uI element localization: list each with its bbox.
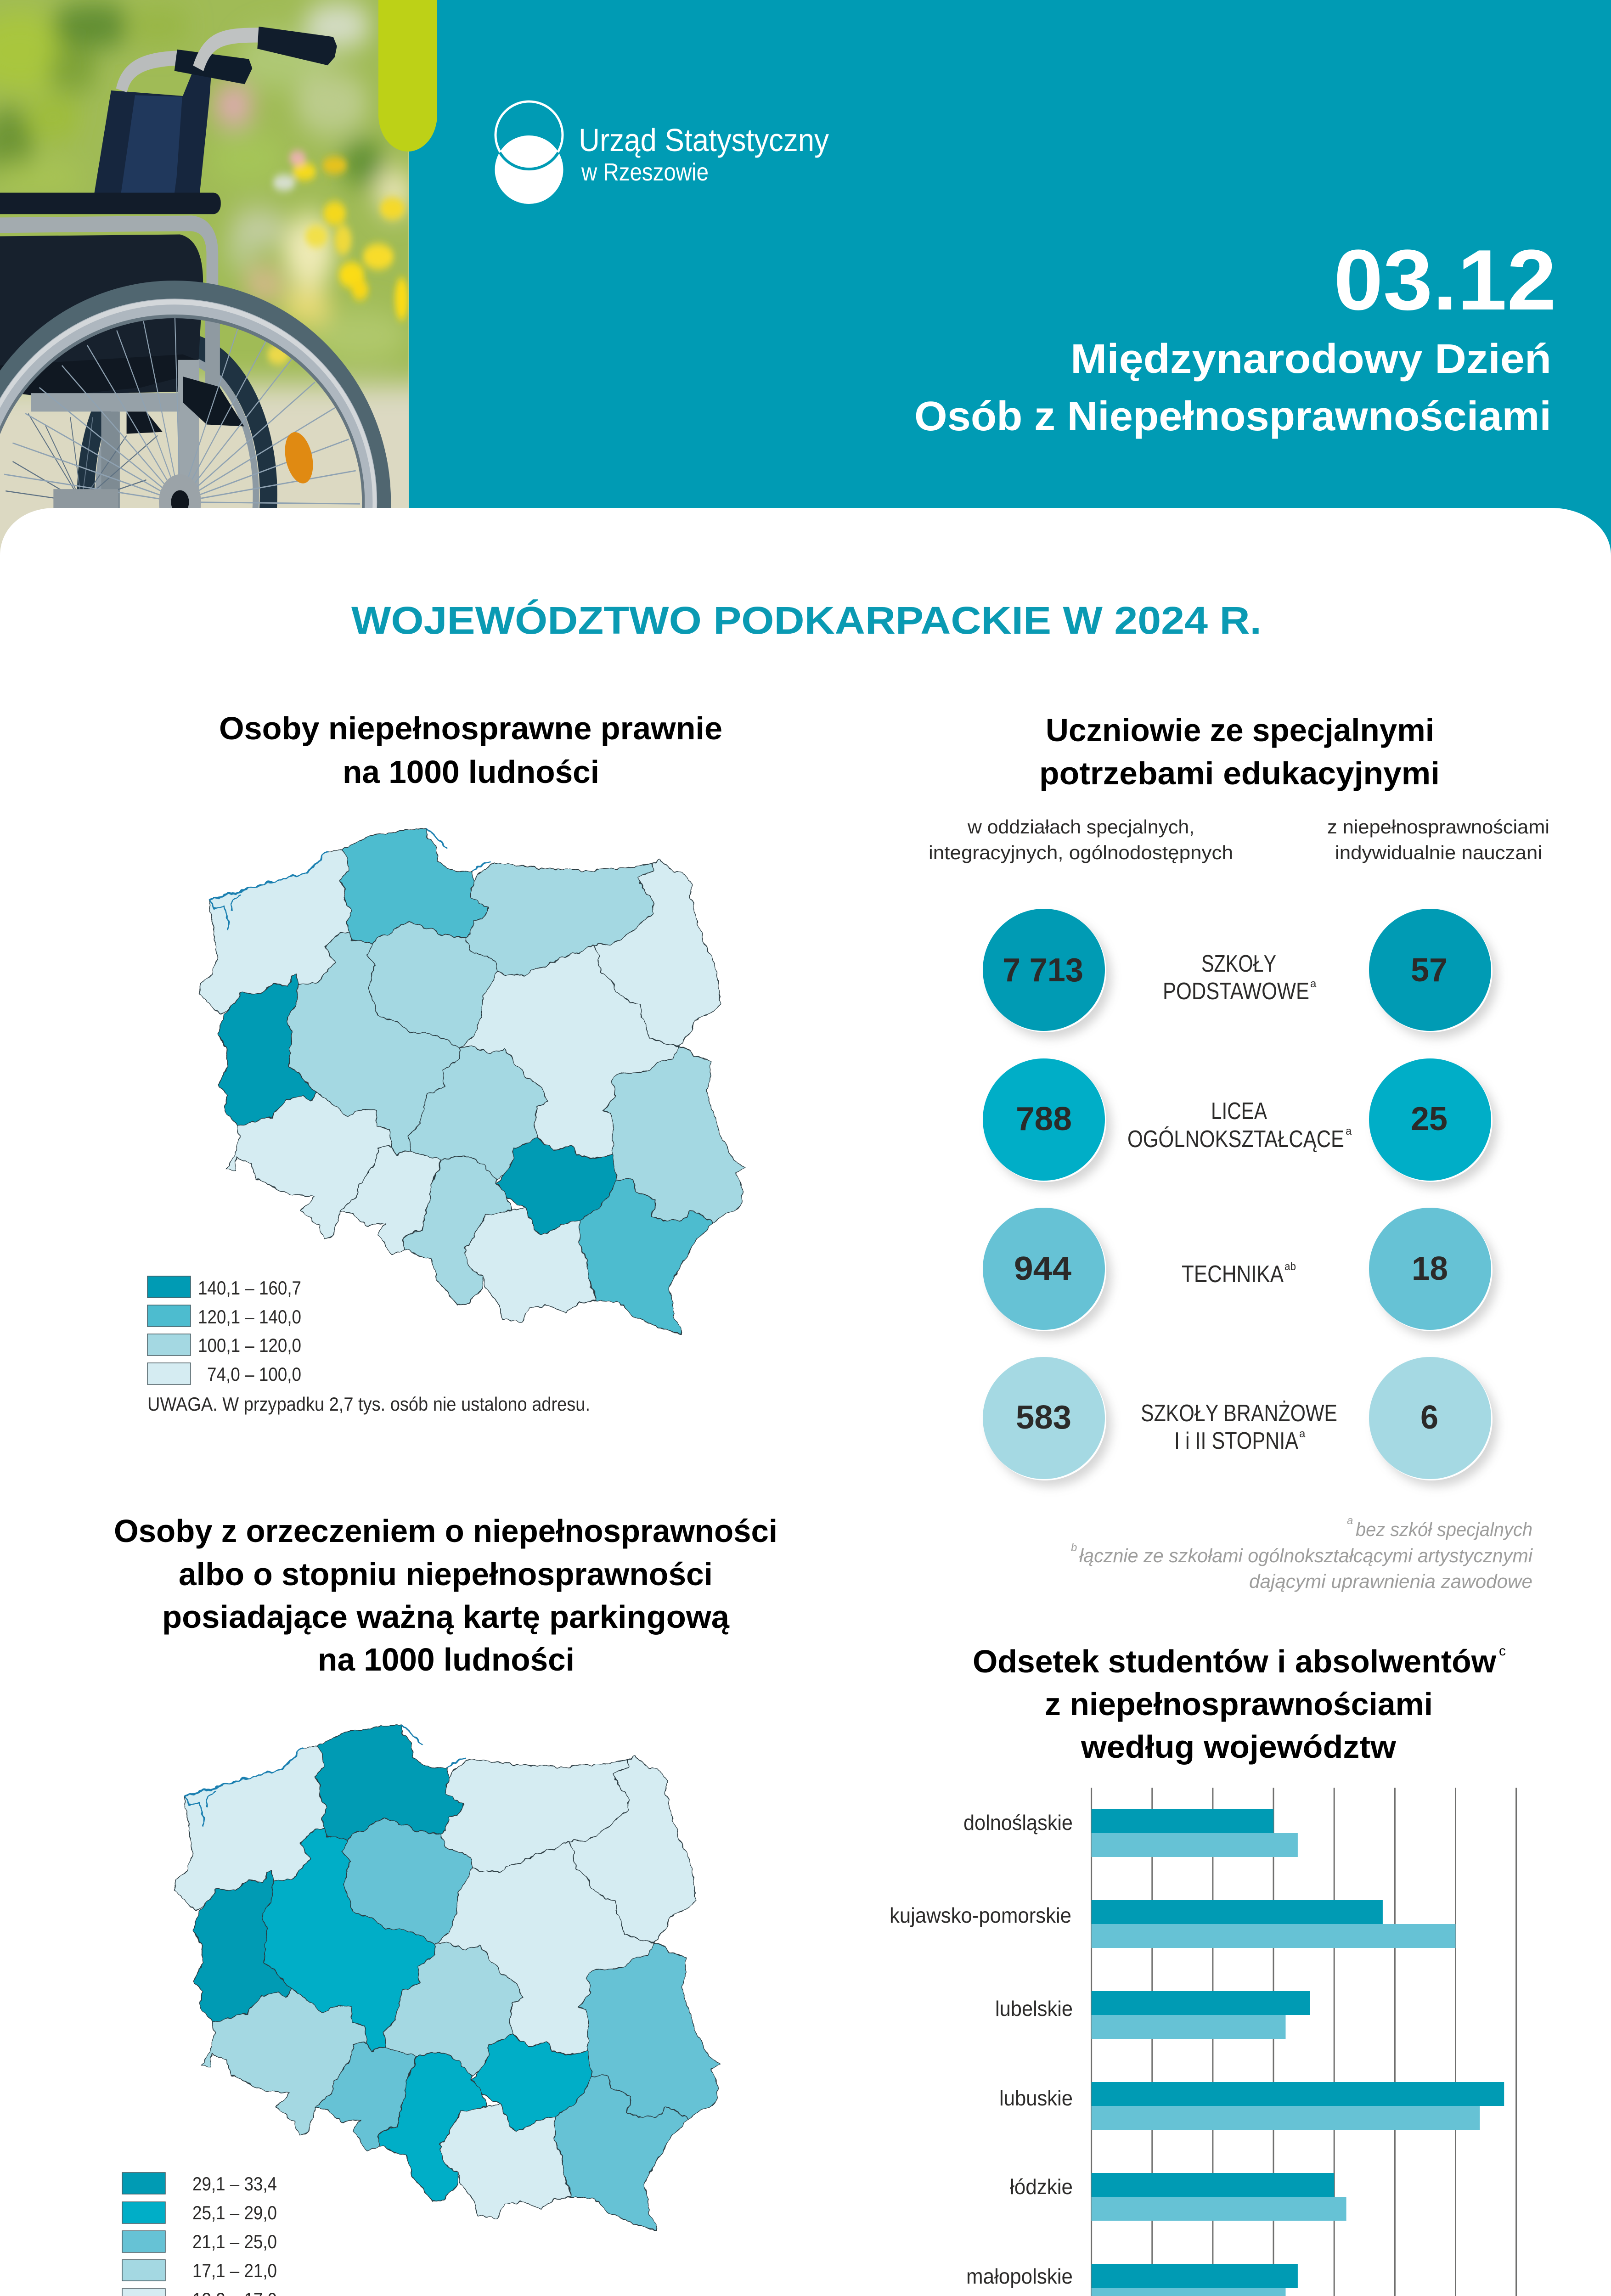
row: technika: 944 <box>1014 1250 1071 1287</box>
row: szkoły branżowe: 583 <box>1016 1399 1071 1436</box>
footnotes: bez szkół specjalnych <box>1356 1519 1532 1540</box>
logo: Urząd Statystyczny w Rzeszowie: w Rzeszowie <box>581 158 709 186</box>
heading: według województw <box>1081 1729 1397 1765</box>
map legend: 100,1 – 120,0 <box>198 1334 301 1356</box>
voivodeship labels <box>879 1811 1073 2296</box>
note: UWAGA. W przypadku 2,7 tys. osób nie ustalono adresu. <box>147 1393 590 1415</box>
column heading: left: integracyjnych, ogólnodostępnych <box>929 842 1233 863</box>
panel: parking card map <box>114 1513 777 2296</box>
row: szkoły podstawowe: 7 713 <box>1003 952 1083 989</box>
panel: students and graduates bar chart <box>879 1643 1535 2296</box>
frame tubes <box>0 223 212 288</box>
heading: na 1000 ludności <box>343 754 599 790</box>
map legend: 140,1 – 160,7 <box>198 1277 301 1299</box>
armrest <box>0 193 221 214</box>
voivodeship labels: lubelskie <box>995 1997 1073 2020</box>
footnotes: łącznie ze szkołami ogólnokształcącymi artystycznymi <box>1079 1545 1533 1566</box>
heading: posiadające ważną kartę parkingową <box>162 1599 730 1635</box>
heading <box>1039 712 1440 791</box>
column heading: right: z niepełnosprawnościami <box>1327 816 1549 838</box>
voivodeship labels: dolnośląskie <box>963 1811 1073 1835</box>
tyre and rim <box>0 290 384 715</box>
row: szkoły branżowe <box>983 1357 1498 1486</box>
main title: WOJEWÓDZTWO PODKARPACKIE W 2024 R. <box>351 599 1262 642</box>
heading: Uczniowie ze specjalnymi <box>1046 712 1434 748</box>
photo: wheelchair in a garden <box>0 0 409 554</box>
row: licea ogólnokształcące: 25 <box>1411 1101 1448 1137</box>
heading: z niepełnosprawnościami <box>1045 1686 1433 1722</box>
chart grid <box>1092 1788 1516 2296</box>
row: licea ogólnokształcące <box>983 1058 1498 1188</box>
footnotes: dającymi uprawnienia zawodowe <box>1249 1570 1532 1592</box>
row: szkoły podstawowe: a <box>1310 978 1317 990</box>
row: szkoły podstawowe: SZKOŁY <box>1201 951 1276 977</box>
voivodeship labels: małopolskie <box>966 2264 1073 2288</box>
map legend <box>147 1276 301 1385</box>
row: technika <box>983 1208 1498 1337</box>
row: licea ogólnokształcące: LICEA <box>1211 1098 1267 1125</box>
wheel behind <box>77 336 277 508</box>
row: szkoły branżowe: SZKOŁY BRANŻOWE <box>1141 1400 1337 1427</box>
voivodeship labels: lubuskie <box>999 2086 1073 2110</box>
row: technika: 18 <box>1412 1250 1448 1287</box>
logo: Urząd Statystyczny w Rzeszowie: Urząd Statystyczny <box>579 122 829 158</box>
map legend: 17,1 – 21,0 <box>192 2260 277 2281</box>
lime tab <box>378 0 437 152</box>
map legend: 21,1 – 25,0 <box>192 2231 277 2252</box>
seat cushion <box>0 234 203 395</box>
row: szkoły podstawowe: 57 <box>1411 952 1448 989</box>
heading: Odsetek studentów i absolwentów <box>973 1643 1497 1679</box>
reflector <box>280 427 318 489</box>
map of Poland <box>199 828 744 1334</box>
heading <box>219 710 722 790</box>
footnotes: b <box>1071 1542 1077 1554</box>
row: technika: TECHNIKA <box>1182 1261 1284 1288</box>
map legend: 25,1 – 29,0 <box>192 2202 277 2223</box>
date and event title: Osób z Niepełnosprawnościami <box>914 394 1551 439</box>
heading: potrzebami edukacyjnymi <box>1039 755 1440 791</box>
row: szkoły podstawowe <box>983 909 1498 1038</box>
row: szkoły branżowe: a <box>1299 1428 1306 1440</box>
row: licea ogólnokształcące: OGÓLNOKSZTAŁCĄCE <box>1127 1126 1344 1153</box>
white content panel <box>0 508 1611 2296</box>
column heading: left <box>929 816 1233 863</box>
row: szkoły podstawowe: PODSTAWOWE <box>1163 978 1309 1005</box>
heading: albo o stopniu niepełnosprawności <box>179 1556 713 1592</box>
date and event title: 03.12 <box>1334 232 1556 328</box>
bars: students <box>1092 1809 1504 2296</box>
heading <box>973 1643 1506 1765</box>
header band <box>409 0 1611 569</box>
panel: pupils with special educational needs <box>929 712 1549 1592</box>
heading: Osoby z orzeczeniem o niepełnosprawności <box>114 1513 777 1549</box>
map legend: 120,1 – 140,0 <box>198 1306 301 1328</box>
footnotes <box>1071 1514 1533 1592</box>
footnotes: a <box>1347 1514 1353 1527</box>
voivodeship labels: kujawsko-pomorskie <box>890 1903 1071 1927</box>
date and event title: Międzynarodowy Dzień <box>1070 336 1551 382</box>
spokes <box>6 413 158 502</box>
map legend: 74,0 – 100,0 <box>207 1363 301 1385</box>
map legend <box>122 2172 277 2296</box>
heading: na 1000 ludności <box>318 1642 575 1677</box>
backrest <box>94 68 212 194</box>
row: technika: ab <box>1284 1261 1296 1273</box>
heading: c <box>1499 1643 1506 1659</box>
map legend: 29,1 – 33,4 <box>192 2173 277 2195</box>
panel: legally disabled persons map <box>147 710 744 1415</box>
column heading: left: w oddziałach specjalnych, <box>967 816 1194 838</box>
handles <box>122 58 180 90</box>
heading: Osoby niepełnosprawne prawnie <box>219 710 722 746</box>
bars: graduates <box>1092 1833 1480 2296</box>
row: licea ogólnokształcące: a <box>1346 1125 1352 1137</box>
map of Poland <box>174 1724 719 2230</box>
heading <box>114 1513 777 1677</box>
date and event title <box>914 232 1556 439</box>
row: szkoły branżowe: I i II STOPNIA <box>1174 1428 1298 1454</box>
row: szkoły branżowe: 6 <box>1420 1399 1438 1436</box>
voivodeship labels: łódzkie <box>1010 2175 1073 2199</box>
column heading: right: indywidualnie nauczani <box>1335 842 1542 863</box>
row: licea ogólnokształcące: 788 <box>1016 1101 1072 1137</box>
logo: Urząd Statystyczny w Rzeszowie <box>495 101 829 204</box>
column heading: right <box>1327 816 1549 863</box>
